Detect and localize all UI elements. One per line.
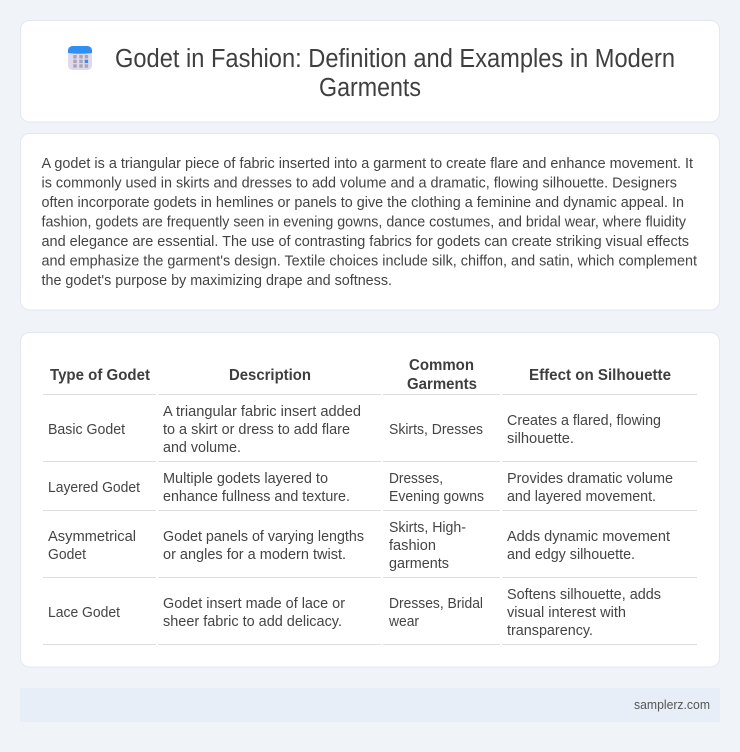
table header row <box>50 357 671 393</box>
table row: basic godet: Skirts, Dresses <box>389 422 483 438</box>
title: Garments <box>319 74 421 102</box>
table row: layered godet <box>48 471 673 505</box>
table header row: Type of Godet <box>50 367 151 384</box>
table header row: Common <box>409 357 474 374</box>
panel: title card <box>20 20 720 122</box>
text block: definition: and emphasize the garment's design. Textile choices include silk, chiffon, and satin, which complement <box>42 254 697 270</box>
table row: lace godet <box>48 587 661 639</box>
table row: asymmetrical godet: or angles for a modern twist. <box>163 547 346 563</box>
table row: asymmetrical godet: fashion <box>389 538 436 554</box>
table row: asymmetrical godet: Adds dynamic movement <box>507 529 670 545</box>
icon: calendar <box>68 46 92 70</box>
table row: lace godet: sheer fabric to add delicacy. <box>163 614 342 630</box>
table row: lace godet: Lace Godet <box>48 605 120 621</box>
table row: layered godet: Evening gowns <box>389 489 484 505</box>
text block: definition <box>42 156 697 289</box>
table row: lace godet: Dresses, Bridal <box>389 596 483 612</box>
table row: lace godet: wear <box>388 614 419 630</box>
table row: lace godet: Softens silhouette, adds <box>507 587 661 603</box>
panel: godet types table <box>20 332 720 667</box>
table row: asymmetrical godet: Skirts, High- <box>389 520 466 536</box>
title: Godet in Fashion: Definition and Examples in Modern <box>115 45 675 73</box>
table row: basic godet: to a skirt or dress to add flare <box>163 422 350 438</box>
table header row: Garments <box>407 376 477 393</box>
table row: asymmetrical godet: garments <box>389 556 449 572</box>
table row: lace godet: transparency. <box>507 623 593 639</box>
text block: definition: often incorporate godets in hemlines or panels to give the clothing a feminine and dynamic appeal. In <box>42 195 684 211</box>
table row: asymmetrical godet: Godet panels of varying lengths <box>163 529 364 545</box>
table row: basic godet: and volume. <box>163 440 241 456</box>
panel: definition paragraph <box>20 134 720 310</box>
table row: asymmetrical godet <box>48 520 670 572</box>
text block: definition: the godet's purpose by maximizing drape and softness. <box>42 273 392 289</box>
table row: layered godet: Provides dramatic volume <box>507 471 673 487</box>
text block: definition: A godet is a triangular piece of fabric inserted into a garment to create flare and enhance movement. It <box>42 156 693 172</box>
table row: basic godet: A triangular fabric insert added <box>163 404 361 420</box>
table row: basic godet: silhouette. <box>507 431 574 447</box>
table row: layered godet: enhance fullness and texture. <box>163 489 350 505</box>
text block: definition: fashion, godets are frequently seen in evening gowns, dance costumes, and bridal wear, where fluidity <box>42 214 687 230</box>
table row: lace godet: Godet insert made of lace or <box>163 596 345 612</box>
table row: layered godet: and layered movement. <box>507 489 656 505</box>
table row: basic godet: Basic Godet <box>48 422 125 438</box>
table row: basic godet <box>48 404 661 456</box>
table row: asymmetrical godet: Godet <box>48 547 86 563</box>
title <box>115 45 675 102</box>
table row: asymmetrical godet: Asymmetrical <box>48 529 136 545</box>
footer bar <box>20 688 720 722</box>
table header row: Description <box>229 367 311 384</box>
table row: basic godet: Creates a flared, flowing <box>507 413 661 429</box>
table row: layered godet: Dresses, <box>389 471 443 487</box>
text block: definition: and elegance are essential. The use of contrasting fabrics for godets can create striking visual effects <box>42 234 689 250</box>
table header row: Effect on Silhouette <box>529 367 671 384</box>
text block: definition: is commonly used in skirts and dresses to add volume and a dramatic, flowing silhouette. Designers <box>42 176 677 192</box>
table row: asymmetrical godet: and edgy silhouette. <box>507 547 635 563</box>
table row: lace godet: visual interest with <box>507 605 626 621</box>
table row: layered godet: Layered Godet <box>48 480 140 496</box>
table row: layered godet: Multiple godets layered to <box>163 471 328 487</box>
footer source text: samplerz.com <box>634 697 710 712</box>
